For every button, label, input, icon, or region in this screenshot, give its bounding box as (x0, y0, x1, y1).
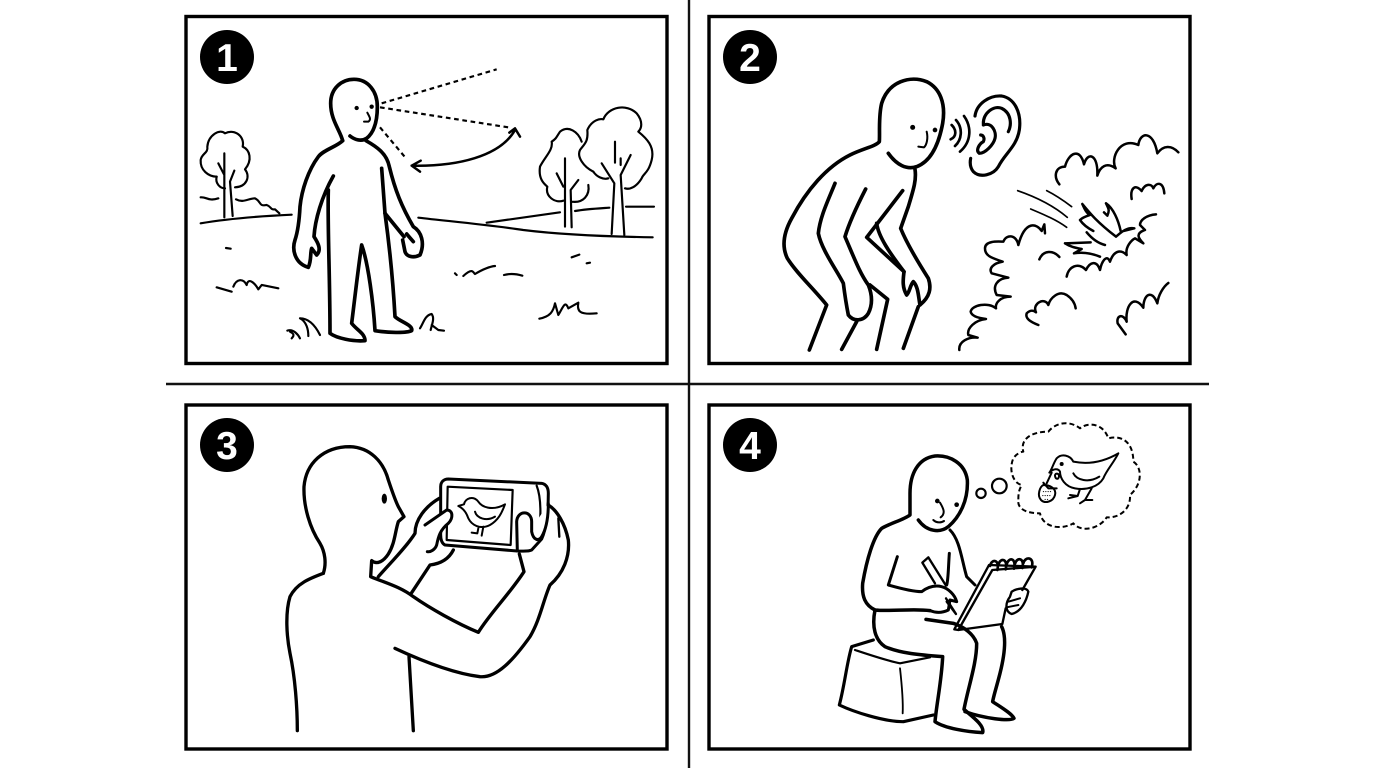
stone seat (839, 640, 933, 722)
person bending forward (784, 79, 944, 350)
panel 1: look around (186, 16, 667, 364)
thought circles (976, 479, 1007, 498)
badge 4 (723, 418, 777, 472)
person from behind (287, 447, 569, 731)
scene 1: person and park (201, 69, 654, 341)
sound waves (951, 116, 969, 152)
person looking around (294, 79, 422, 341)
notepad (954, 558, 1036, 630)
scene 4: seated person drawing (839, 423, 1140, 733)
panel 4: sketch notes (709, 405, 1190, 749)
badge 3 (200, 418, 254, 472)
panel 2: listen (709, 16, 1190, 364)
seated person (862, 456, 1014, 733)
trees and ground (201, 107, 654, 338)
rustling bush (959, 135, 1178, 350)
panel 3: photograph (186, 405, 667, 749)
badge 2 (723, 30, 777, 84)
sight lines and sweep arrow (380, 69, 520, 172)
thought cloud with bird and strawberry (1011, 423, 1140, 529)
badge 2: 2 (739, 37, 761, 80)
ear (970, 96, 1020, 175)
scene 2: person listening (784, 79, 1178, 350)
badge 1: 1 (216, 37, 238, 80)
badge 4: 4 (739, 425, 761, 468)
badge 1 (200, 30, 254, 84)
pencil (922, 557, 956, 614)
badge 3: 3 (216, 425, 238, 468)
tablet with hands (425, 479, 548, 552)
bird on screen (458, 498, 505, 536)
scene 3: person with tablet (287, 447, 569, 731)
